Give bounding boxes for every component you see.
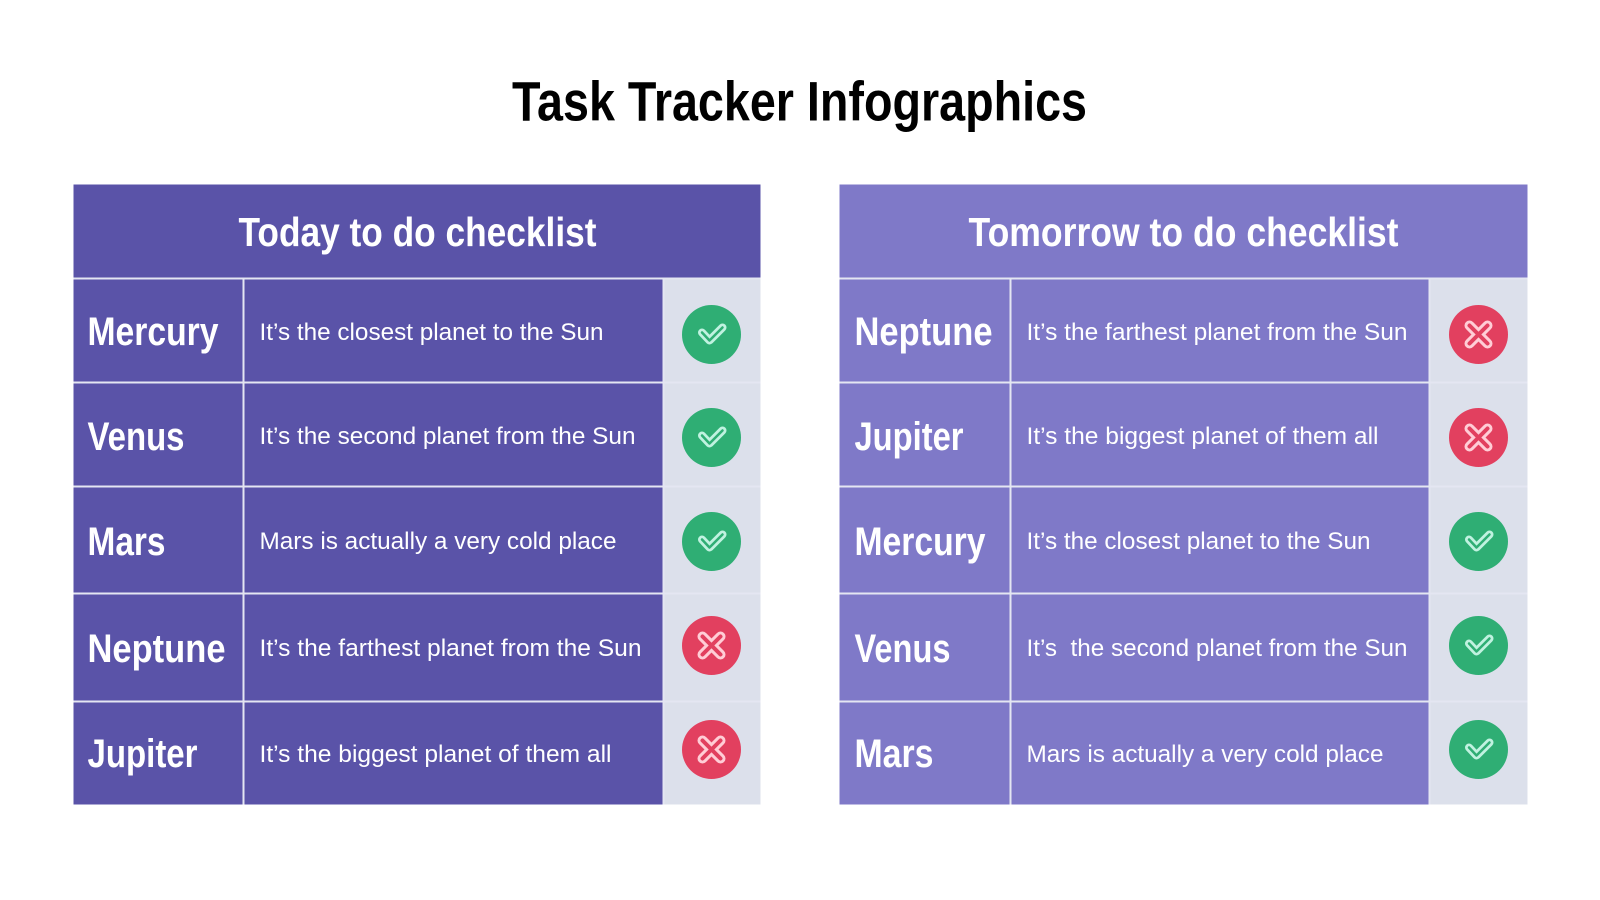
row: Venus: Venus [88,415,184,459]
row: Mars: Mars [854,732,934,776]
row: Mars: Mars is actually a very cold place [1026,741,1384,768]
row: Mars: Mars is actually a very cold place [260,528,616,555]
row: Jupiter: Jupiter [854,415,964,459]
row: Neptune: It’s the farthest planet from the Sun [260,635,642,662]
row: Mars: Mars [88,520,166,564]
row: Neptune: Neptune [88,627,226,671]
row: Mercury [88,305,741,364]
row: Mercury: Mercury [88,310,219,354]
row: Jupiter [854,408,1508,467]
title: Task Tracker Infographics [512,70,1087,132]
row: Neptune [88,616,741,675]
row: Mars [854,720,1508,779]
row: Mercury: Mercury [854,520,986,564]
row: Venus: Venus [854,627,950,671]
row: Mercury [854,512,1508,571]
row: Venus [88,408,741,467]
panel: tomorrow checklist [840,184,1528,804]
row: Venus [854,616,1508,675]
row: Venus: It’s the second planet from the Sun [260,423,636,450]
row: Neptune: It’s the farthest planet from the Sun [1026,319,1408,346]
heading: tomorrow: Tomorrow to do checklist [968,209,1399,255]
heading: today: Today to do checklist [238,209,597,255]
row: Neptune: Neptune [854,310,992,354]
row: Neptune [854,305,1508,364]
row: Mercury: It’s the closest planet to the Sun [1026,528,1370,555]
panel: today checklist [74,184,760,804]
row: Jupiter: It’s the biggest planet of them all [1026,423,1378,450]
row: Mercury: It’s the closest planet to the Sun [260,319,604,346]
row: Jupiter [88,720,741,779]
row: Venus: It’s the second planet from the Sun [1026,635,1408,662]
row: Mars [88,512,741,571]
row: Jupiter: It’s the biggest planet of them all [260,741,612,768]
row: Jupiter: Jupiter [88,732,198,776]
